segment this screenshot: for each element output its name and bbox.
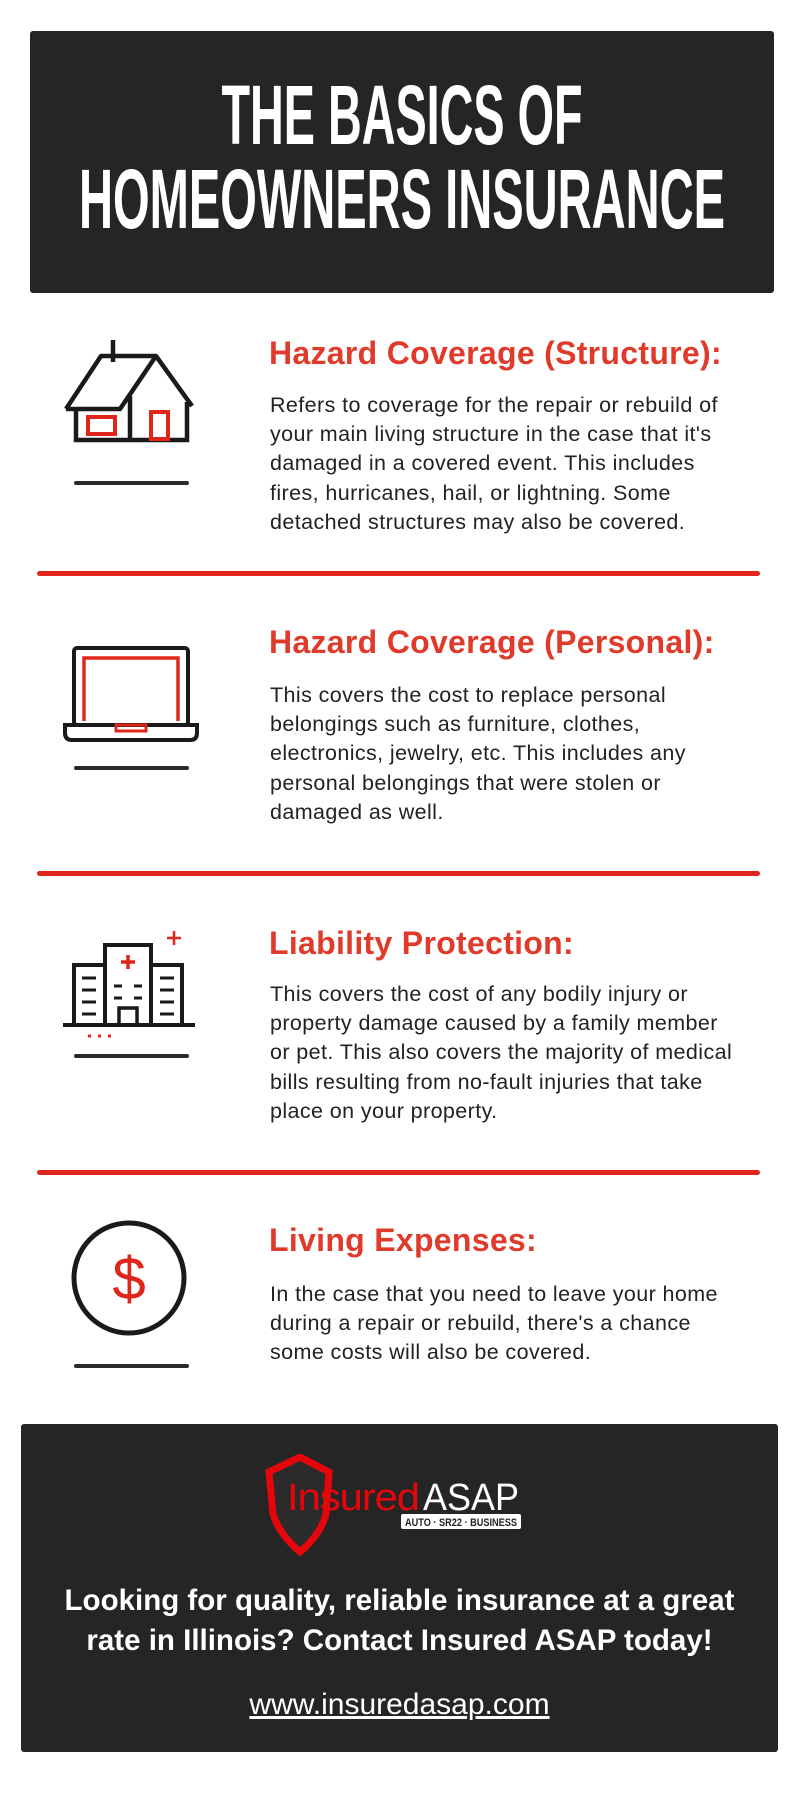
heading: personal: Hazard Coverage (Personal): [269, 624, 715, 660]
icon: laptop [63, 646, 199, 742]
icon: dollar [72, 1220, 186, 1336]
text: liability: place on your property. [270, 1099, 498, 1123]
icon: dollar: $ [112, 1245, 146, 1312]
text: liability: bills resulting from no-fault injuries that take [270, 1070, 703, 1094]
cta text: rate in Illinois? Contact Insured ASAP today! [86, 1624, 713, 1657]
text: structure: detached structures may also be covered. [270, 510, 685, 534]
icon: hospital [63, 931, 195, 1038]
text: structure: Refers to coverage for the repair or rebuild of [270, 393, 718, 417]
text: structure [270, 393, 718, 534]
logo: AUTO · SR22 · BUSINESS [405, 1517, 517, 1529]
logo [265, 1454, 521, 1556]
heading: living: Living Expenses: [269, 1222, 537, 1258]
heading: liability: Liability Protection: [269, 925, 574, 961]
text: personal: belongings such as furniture, clothes, [270, 712, 640, 736]
logo: ASAP [423, 1477, 519, 1519]
text: structure: damaged in a covered event. This includes [270, 451, 695, 475]
text: living: during a repair or rebuild, there's a chance [270, 1311, 691, 1335]
icon: house [64, 340, 194, 442]
text: personal: This covers the cost to replace personal [270, 683, 666, 707]
text: liability [270, 982, 732, 1123]
cta text [65, 1584, 734, 1657]
text: liability: property damage caused by a family member [270, 1011, 718, 1035]
heading: structure: Hazard Coverage (Structure): [269, 335, 722, 371]
text: personal: electronics, jewelry, etc. This includes any [270, 741, 686, 765]
text: living: some costs will also be covered. [270, 1340, 591, 1364]
text: personal: damaged as well. [270, 800, 444, 824]
text: structure: fires, hurricanes, hail, or lightning. Some [270, 481, 671, 505]
text: living: In the case that you need to leave your home [270, 1282, 718, 1306]
title [79, 68, 725, 246]
text: liability: This covers the cost of any bodily injury or [270, 982, 688, 1006]
footer panel [21, 1424, 778, 1752]
text: personal [270, 683, 686, 824]
logo: Insured [287, 1477, 419, 1519]
text: living [270, 1282, 718, 1364]
header banner [30, 31, 774, 293]
cta text: Looking for quality, reliable insurance at a great [65, 1584, 734, 1617]
text: structure: your main living structure in the case that it's [270, 422, 712, 446]
url: www.insuredasap.com [249, 1688, 550, 1721]
text: liability: or pet. This also covers the majority of medical [270, 1040, 732, 1064]
text: personal: personal belongings that were stolen or [270, 771, 661, 795]
